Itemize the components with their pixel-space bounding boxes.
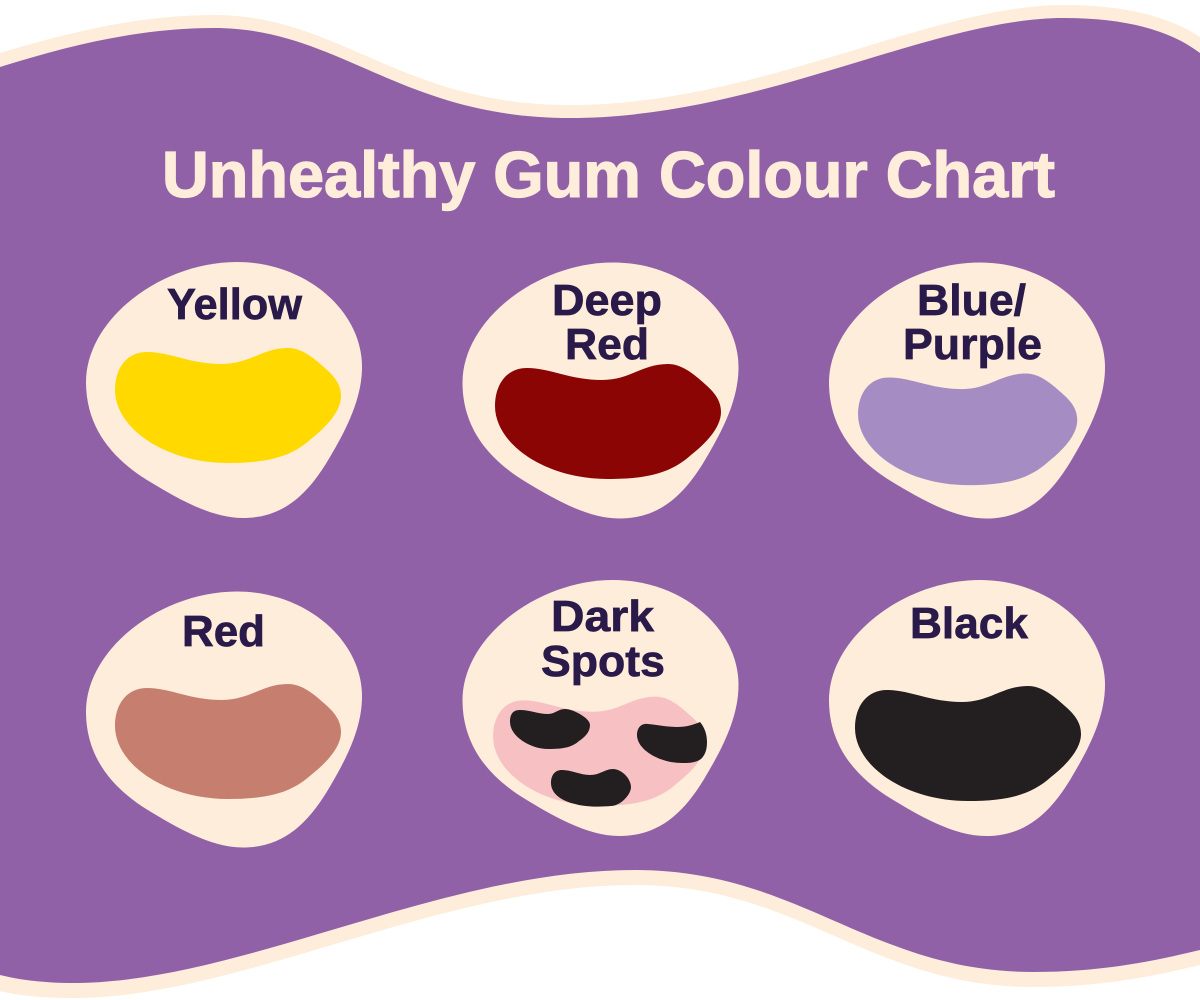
label: dark spots: Dark [551, 592, 655, 641]
label: black: Black [910, 599, 1029, 648]
panel: red [86, 592, 362, 848]
panel: deep red: Red [565, 320, 649, 369]
label: blue/purple: Blue/ [917, 276, 1026, 325]
gum: black [855, 686, 1081, 801]
spot: upper left [510, 709, 590, 749]
gum: pink base [493, 697, 706, 806]
panel: dark spots: Spots [541, 637, 665, 686]
spot: upper right [637, 722, 707, 763]
panel: blue/purple: Purple [903, 320, 1042, 369]
gum: yellow [115, 348, 341, 463]
title: Unhealthy Gum Colour Chart [162, 138, 1055, 211]
panel: deep red [462, 262, 738, 518]
gum: deep red [495, 364, 721, 479]
gum: blue/purple [858, 374, 1077, 485]
label: yellow: Yellow [167, 280, 303, 329]
panel: yellow [86, 262, 362, 518]
panel: blue/purple [829, 262, 1105, 518]
panel: black [829, 580, 1105, 836]
gum: red [115, 684, 341, 799]
spot: bottom [551, 769, 631, 807]
panel: dark spots [462, 580, 738, 836]
label: red: Red [182, 607, 265, 656]
label: deep red: Deep [552, 276, 662, 325]
